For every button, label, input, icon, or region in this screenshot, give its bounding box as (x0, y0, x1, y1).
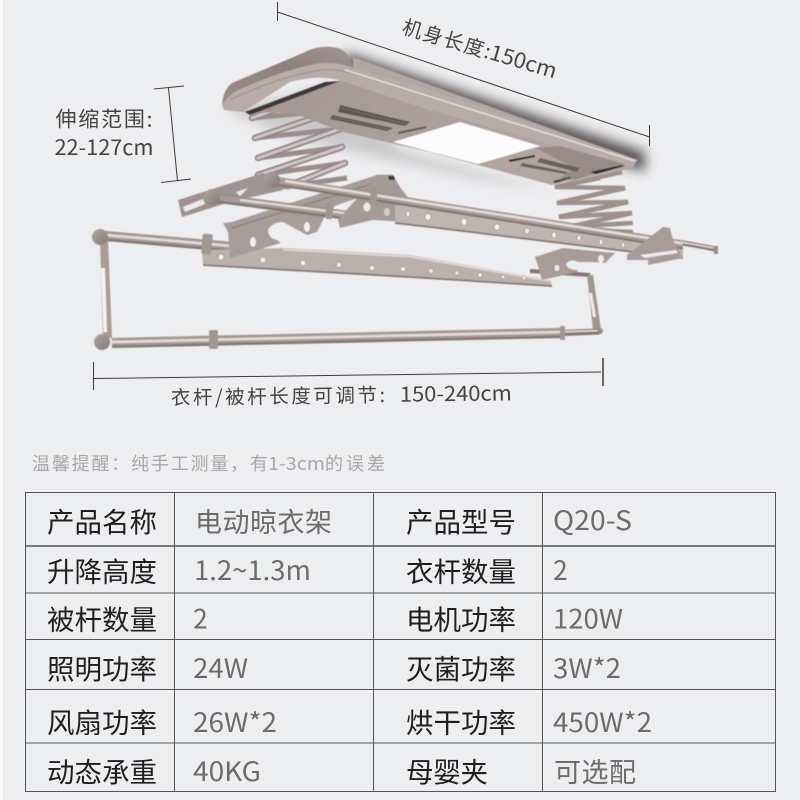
label: rod length: 衣杆/被杆长度可调节: (171, 379, 385, 410)
bottom rod (112, 333, 562, 343)
row 2: 衣杆数量 (406, 550, 516, 590)
label: rod length (171, 376, 512, 410)
label: body length (399, 11, 561, 85)
lower rail assembly (105, 175, 615, 286)
left diagonal bracket (223, 175, 395, 258)
left end plate (178, 173, 283, 217)
right lower rod (530, 271, 590, 275)
rod caps and collars (92, 229, 108, 245)
perforated lower bar (202, 248, 552, 286)
row 4: 照明功率 (47, 647, 157, 687)
label: rod length: 150-240cm (400, 376, 512, 408)
row 4: 3W*2 (553, 647, 621, 686)
note: measurement tolerance: 温馨提醒：纯手工测量，有 (32, 450, 268, 476)
label: body length: 机身长度: (399, 11, 495, 65)
lower rod left segment (105, 236, 232, 247)
row 6: 可选配 (554, 751, 636, 790)
row 6: 动态承重 (47, 750, 157, 790)
row 5: 450W*2 (553, 701, 652, 740)
row 5: 风扇功率 (47, 700, 157, 740)
label: telescopic range: 伸缩范围: (56, 104, 152, 134)
row 4: 24W (193, 647, 248, 686)
ceiling unit shadow (225, 52, 645, 190)
right fan vents (508, 155, 625, 183)
right scissor lift (555, 172, 633, 232)
upper rail assembly (178, 172, 718, 265)
right drop link (587, 275, 601, 330)
row 1: 电动晾衣架 (195, 501, 332, 540)
label: body length: 150cm (486, 37, 561, 85)
label: telescopic range: 22-127cm (54, 132, 154, 162)
note: measurement tolerance: 1-3cm (268, 450, 325, 476)
row 5: 26W*2 (193, 701, 277, 740)
note: measurement tolerance: 的误差 (325, 450, 385, 476)
second rod (215, 198, 352, 216)
left drop link (100, 238, 112, 338)
lower bar holes (218, 254, 526, 280)
ceiling unit body (222, 47, 638, 185)
dark slot near left end (245, 81, 340, 115)
specification table (25, 492, 776, 792)
upper bar holes (406, 211, 661, 252)
row 5: 烘干功率 (406, 700, 516, 740)
row 3 (47, 598, 623, 638)
right rail tip (683, 243, 716, 249)
row 6: 母婴夹 (406, 750, 488, 790)
back top surface (353, 57, 638, 163)
left scissor lift (252, 88, 347, 188)
right lower bracket (535, 248, 615, 280)
left fan vents (330, 105, 427, 134)
housing cap (222, 47, 353, 105)
rod knobs and collars (204, 189, 220, 205)
label: telescopic range (54, 104, 154, 162)
row 5 (47, 700, 652, 740)
right end fan area (535, 146, 625, 180)
dimension: telescopic range line (154, 86, 191, 182)
left edge strip (0, 0, 3, 800)
row 2: 升降高度 (47, 550, 157, 590)
row 3: 2 (193, 598, 208, 636)
row 2: 1.2~1.3m (194, 549, 311, 588)
row 1: 产品型号 (406, 500, 516, 540)
row 6 (47, 750, 636, 790)
dimension: rod length line (94, 358, 603, 390)
row 2: 2 (553, 549, 568, 588)
lower collar (201, 234, 213, 254)
row 1: Q20-S (553, 499, 632, 538)
note: measurement tolerance (32, 450, 385, 476)
row 6: 40KG (193, 750, 261, 789)
row 4: 灭菌功率 (406, 647, 516, 687)
row 3: 电机功率 (406, 598, 516, 638)
upper rod (275, 181, 683, 245)
row 1: 产品名称 (47, 500, 157, 540)
dimension: body length line (278, 2, 650, 146)
LED light panel (393, 122, 540, 164)
row 2 (47, 549, 568, 590)
product illustration: electric drying rack (92, 47, 718, 350)
row 4 (47, 647, 621, 687)
underside panel (243, 80, 632, 185)
drop links and bottom rod (92, 229, 603, 350)
housing rim (222, 63, 638, 168)
perforated upper bar (395, 205, 683, 258)
upper right centre bracket (338, 175, 410, 228)
right end bracket (627, 227, 683, 265)
row 3: 120W (553, 598, 623, 636)
row 1 (47, 499, 632, 540)
table grid (25, 492, 776, 792)
row 3: 被杆数量 (47, 598, 157, 638)
